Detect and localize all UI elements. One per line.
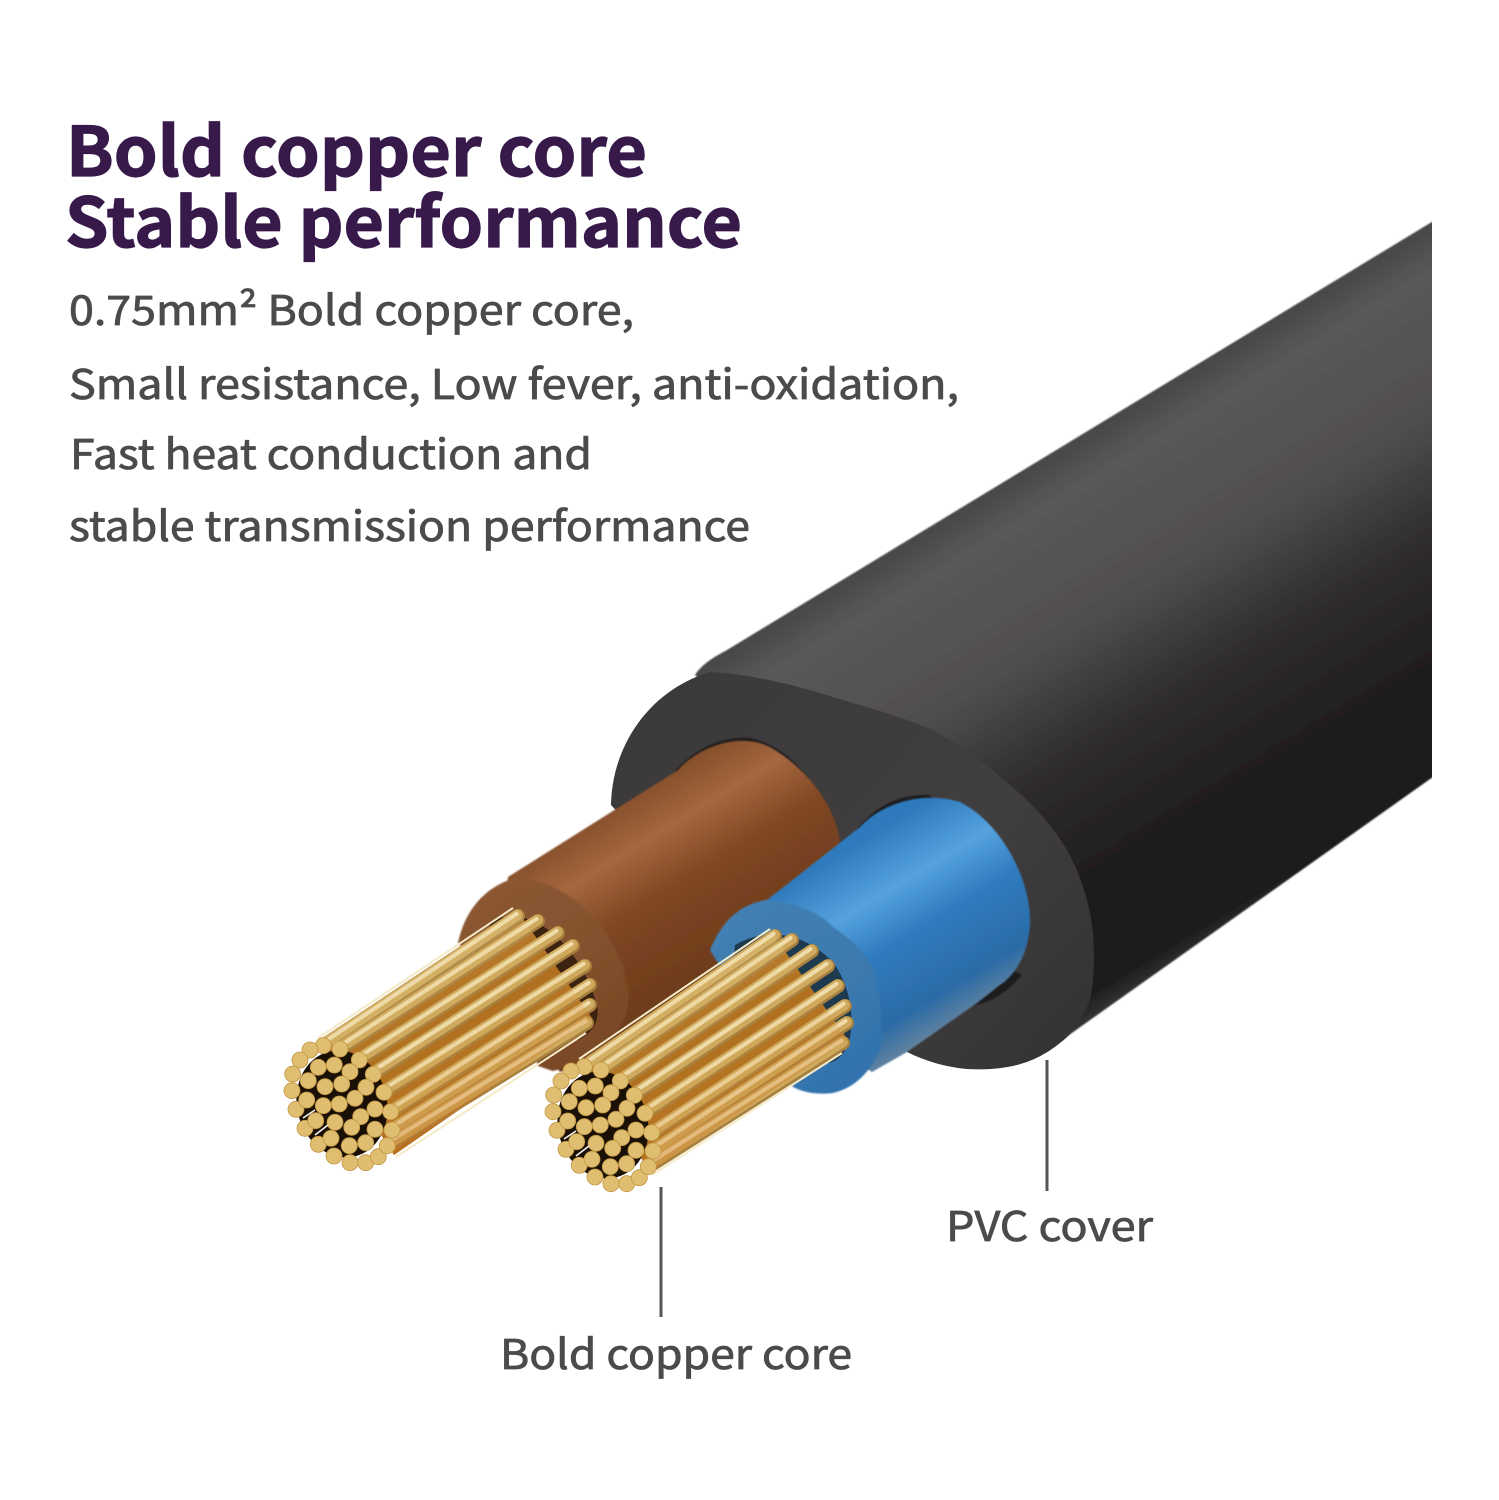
label: PVC cover: PVC cover xyxy=(946,1193,1153,1253)
blue sheath ring xyxy=(710,900,881,1094)
description text block xyxy=(69,277,959,553)
description text block: Small resistance, Low fever, anti-oxidation, xyxy=(69,351,959,411)
copper end: blue wire xyxy=(545,1059,661,1192)
label: bold copper core: Bold copper core xyxy=(500,1321,852,1381)
strand edge glow xyxy=(318,908,586,1157)
blue wire insulation xyxy=(710,798,1030,1094)
strand ends xyxy=(545,1059,661,1192)
strand shadow layer xyxy=(323,916,590,1146)
strand highlights xyxy=(583,934,846,1165)
brown wire insulation xyxy=(458,741,840,1072)
brown sheath body xyxy=(500,741,840,1072)
strand ends xyxy=(284,1038,400,1171)
blue sheath opening xyxy=(730,935,852,1064)
brown sheath ring xyxy=(458,878,628,1071)
copper strands: blue wire xyxy=(579,929,848,1175)
copper end: brown wire xyxy=(284,1038,400,1171)
strand shading xyxy=(320,910,592,1155)
copper strands: brown wire xyxy=(318,908,592,1157)
strand bases xyxy=(583,935,846,1166)
white scratches xyxy=(303,1110,328,1135)
strand shading xyxy=(581,933,848,1172)
leader line: bold copper core xyxy=(660,1187,662,1317)
jacket end face xyxy=(611,672,1094,1069)
brown cable gap xyxy=(674,737,805,774)
blue cable gap xyxy=(855,795,1022,1006)
strand shadow layer xyxy=(584,936,847,1167)
blue sheath body xyxy=(760,798,1030,1072)
title xyxy=(65,97,742,267)
white scratches xyxy=(564,1131,589,1156)
leader line: PVC cover xyxy=(1046,1060,1048,1191)
title: Stable performance xyxy=(65,168,742,267)
strand bases xyxy=(322,915,589,1145)
end backing xyxy=(285,1041,399,1167)
description text block: Fast heat conduction and xyxy=(70,421,592,481)
strand bundle base xyxy=(581,933,848,1172)
outer PVC jacket body xyxy=(695,217,1440,1040)
strand highlights xyxy=(322,914,589,1144)
description text block: 0.75mm² Bold copper core, xyxy=(69,277,634,337)
strand bundle base xyxy=(320,910,592,1155)
title: Bold copper core xyxy=(66,97,647,196)
strand edge glow xyxy=(579,929,842,1175)
brown sheath opening xyxy=(480,916,598,1040)
end backing xyxy=(546,1062,660,1188)
description text block: stable transmission performance xyxy=(69,493,750,553)
cable illustration xyxy=(284,217,1440,1192)
